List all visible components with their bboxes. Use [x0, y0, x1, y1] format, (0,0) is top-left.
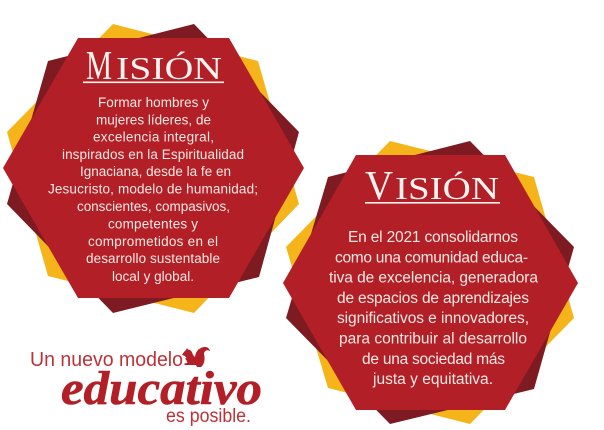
mission heading: ISIÓN — [116, 50, 222, 86]
mission text: local y global. — [112, 269, 194, 284]
vision text: como una comunidad educa- — [335, 249, 528, 266]
mission text: Jesucristo, modelo de humanidad; — [48, 182, 258, 196]
vision red hexagon — [283, 155, 578, 410]
mission text: excelencia integral, — [93, 130, 214, 144]
mission heading: M — [86, 42, 112, 88]
panel: vision — [283, 141, 578, 424]
vision heading: ISIÓN — [395, 170, 499, 206]
mission yellow hexagon — [7, 24, 299, 313]
mission text: mujeres líderes, de — [96, 112, 211, 128]
vision text: justa y equitativa. — [372, 371, 493, 388]
vision text: para contribuir al desarrollo — [339, 330, 527, 348]
logo line: es posible: es posible. — [166, 406, 251, 427]
vision text: En el 2021 consolidarnos — [348, 229, 518, 246]
mission text: desarrollo sustentable — [86, 251, 220, 266]
logo word: educativo: educativo — [61, 362, 262, 415]
vision text: tiva de excelencia, generadora — [329, 270, 538, 287]
vision heading: V — [365, 162, 393, 208]
logo: un nuevo modelo educativo es posible — [30, 347, 262, 427]
panel: mission — [3, 24, 304, 313]
vision text: de espacios de aprendizajes — [337, 290, 529, 307]
icon: squirrel — [182, 347, 210, 367]
mission text: conscientes, compasivos, — [77, 199, 230, 214]
mission red hexagon — [3, 38, 304, 298]
logo line: un nuevo modelo: Un nuevo modelo — [30, 348, 183, 371]
vision text: significativos e innovadores, — [337, 310, 529, 327]
vision yellow hexagon — [286, 141, 574, 424]
mission text: comprometidos en el — [88, 234, 218, 249]
vision heading — [365, 162, 500, 208]
mission dark red hexagon — [7, 24, 299, 313]
mission text: Ignaciana, desde la fe en — [80, 164, 231, 179]
vision text: de una sociedad más — [362, 351, 505, 368]
mission text: Formar hombres y — [98, 95, 209, 110]
mission heading — [83, 42, 224, 88]
mission text: inspirados en la Espiritualidad — [62, 147, 244, 162]
mission text: competentes y — [108, 216, 198, 232]
vision dark red hexagon — [286, 141, 574, 424]
